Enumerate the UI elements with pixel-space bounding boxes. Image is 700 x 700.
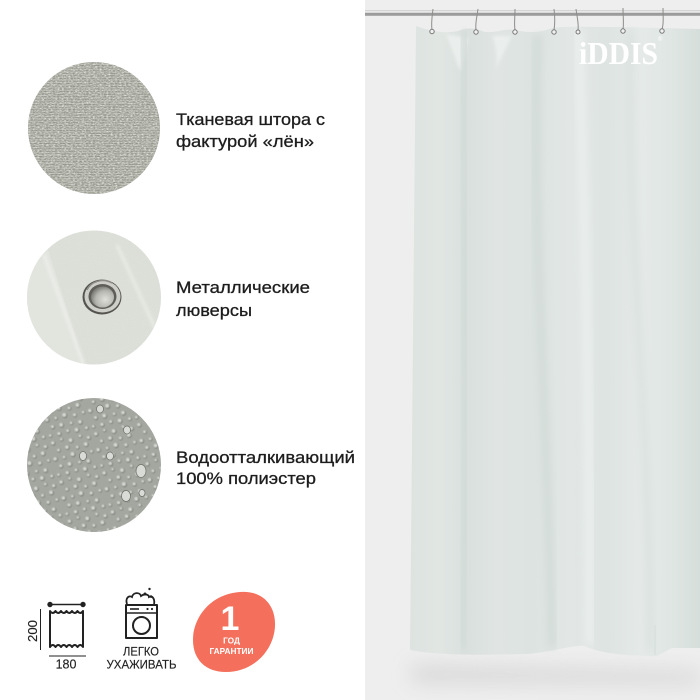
badge: one year warranty: ГАРАНТИИ xyxy=(210,646,254,656)
logo: IDDIS: iDDIS xyxy=(579,35,658,71)
grommet xyxy=(82,280,122,314)
icon: curtain dimensions xyxy=(26,602,86,672)
warranty label: ГОД xyxy=(223,636,240,646)
curtain folds xyxy=(446,30,655,655)
photo: linen texture swatch xyxy=(28,62,160,194)
label: height: 200 xyxy=(26,620,40,642)
badge: one year warranty xyxy=(193,592,275,672)
photo: water droplets swatch xyxy=(27,398,161,532)
feature text: grommets: люверсы xyxy=(176,301,252,320)
feature text: water repellent: Водоотталкивающий xyxy=(176,448,355,467)
photo: metal grommet swatch xyxy=(27,230,161,365)
number 1: 1 xyxy=(221,600,239,638)
hooks and grommets xyxy=(430,8,664,34)
feature text: grommets: Металлические xyxy=(176,278,310,297)
floor shadow xyxy=(412,666,700,684)
label: easy care: ЛЕГКО xyxy=(123,646,159,658)
logo: IDDIS: ® xyxy=(658,36,663,43)
label: easy care second line: УХАЖИВАТЬ xyxy=(106,660,176,672)
feature text: linen: Тканевая штора с xyxy=(176,110,326,129)
photo background xyxy=(365,0,700,700)
large droplets xyxy=(80,405,146,502)
panel: curtain photo xyxy=(365,0,700,700)
label: width: 180 xyxy=(56,658,76,672)
feature text: water repellent: 100% полиэстер xyxy=(176,469,316,488)
curtain rod xyxy=(365,10,700,16)
curtain fabric xyxy=(410,26,700,656)
icon: washing machine xyxy=(123,588,159,658)
feature text: linen: фактурой «лён» xyxy=(176,132,314,151)
